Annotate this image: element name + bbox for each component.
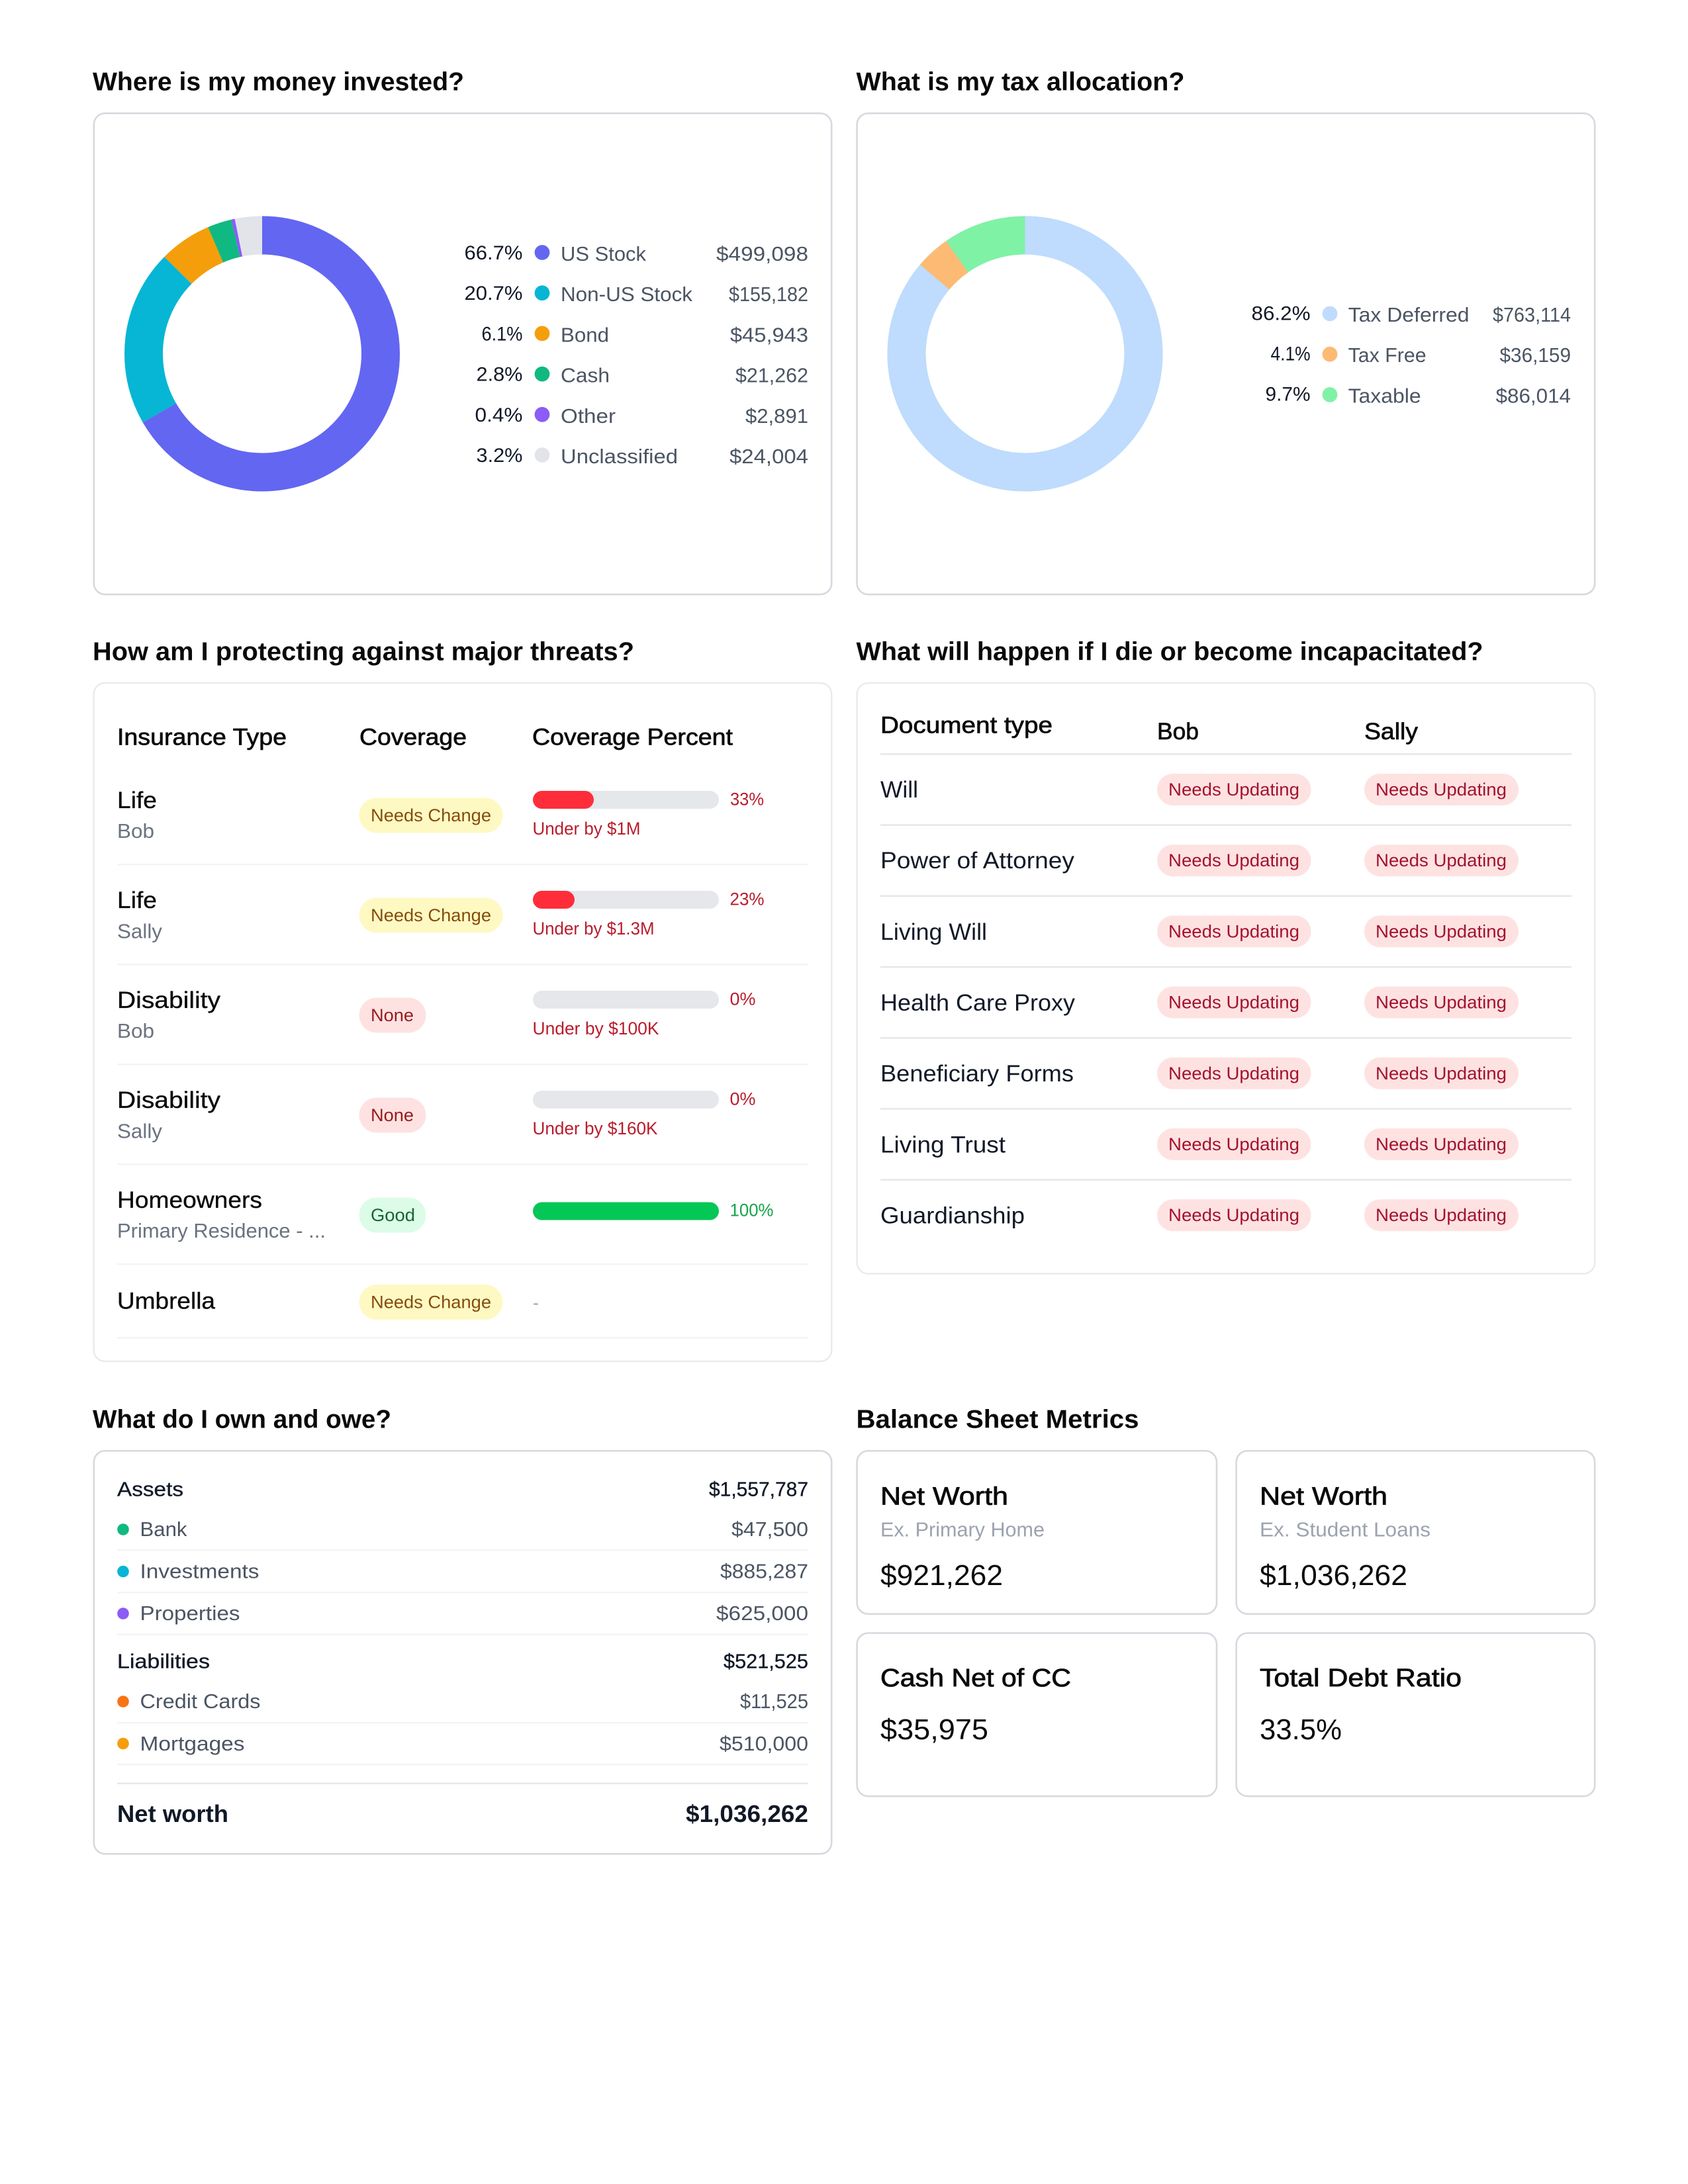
row: umbrella: -: [533, 1293, 539, 1313]
row: disability bob: None: [371, 1005, 414, 1025]
card: net worth ex student loans: $1,036,262: [1260, 1559, 1407, 1592]
row: disability sally: None: [371, 1105, 414, 1125]
legend: investment allocation: $499,098: [716, 242, 808, 265]
legend: investment allocation: 3.2%: [477, 445, 523, 467]
legend: investment allocation: 2.8%: [477, 364, 523, 386]
row: living trust: Needs Updating: [1376, 1134, 1507, 1154]
row: umbrella: Umbrella: [117, 1288, 216, 1314]
assets group: $1,557,787: [709, 1478, 808, 1501]
row: disability sally: Under by $160K: [532, 1118, 658, 1138]
row: umbrella: [117, 1285, 539, 1320]
legend: investment allocation: 20.7%: [465, 283, 523, 304]
row: will: Will: [880, 777, 918, 803]
legend: tax allocation: Taxable: [1348, 384, 1421, 407]
heading: where is my money invested: Where is my money invested?: [93, 68, 464, 97]
row: life bob: Life: [117, 788, 157, 813]
row: disability sally: [117, 1087, 756, 1142]
heading: balance sheet metrics: Balance Sheet Metrics: [857, 1406, 1139, 1433]
table header: Coverage Percent: [532, 724, 733, 751]
panel: estate documents table: [857, 683, 1595, 1274]
row: will: Needs Updating: [1168, 780, 1299, 799]
legend: tax allocation: [1251, 302, 1571, 407]
row: disability bob: 0%: [729, 989, 756, 1009]
row: power of attorney: Needs Updating: [1376, 850, 1507, 870]
row: life bob: Under by $1M: [532, 819, 641, 839]
row: health care proxy: Needs Updating: [1376, 993, 1507, 1013]
row: life sally: Needs Change: [371, 905, 491, 925]
legend: tax allocation: $86,014: [1496, 384, 1571, 407]
legend: investment allocation: [465, 242, 808, 468]
legend: investment allocation: $155,182: [729, 283, 808, 306]
liabilities group: Mortgages: [140, 1732, 245, 1755]
row: beneficiary forms: Needs Updating: [1168, 1064, 1299, 1083]
row: life bob: Bob: [117, 819, 154, 842]
row: homeowners: Primary Residence - ...: [117, 1219, 326, 1242]
card: total debt ratio: [1237, 1633, 1595, 1796]
legend: tax allocation: Tax Free: [1348, 343, 1427, 367]
liabilities group: Liabilities: [117, 1650, 210, 1673]
row: umbrella: Needs Change: [371, 1292, 491, 1312]
row: beneficiary forms: Beneficiary Forms: [880, 1061, 1074, 1087]
row: living will: Living Will: [880, 919, 987, 945]
card: net worth ex primary home: Ex. Primary Home: [880, 1518, 1045, 1541]
panel: insurance table: [94, 683, 831, 1361]
row: health care proxy: Needs Updating: [1168, 993, 1299, 1013]
table header: Sally: [1364, 719, 1419, 745]
legend: investment allocation: 66.7%: [465, 242, 523, 264]
legend: investment allocation: $45,943: [730, 323, 808, 346]
row: disability sally: Disability: [117, 1087, 221, 1113]
row: health care proxy: [880, 987, 1519, 1019]
legend: investment allocation: 6.1%: [482, 323, 523, 345]
row: life sally: Under by $1.3M: [532, 919, 654, 938]
card: net worth ex primary home: Net Worth: [880, 1482, 1008, 1510]
row: homeowners: [117, 1187, 773, 1242]
legend: tax allocation: Tax Deferred: [1348, 303, 1470, 326]
table header: Coverage: [359, 724, 467, 751]
row: health care proxy: Health Care Proxy: [880, 990, 1076, 1016]
row: power of attorney: Power of Attorney: [880, 848, 1075, 874]
table header: Bob: [1157, 719, 1199, 745]
row: power of attorney: Needs Updating: [1168, 850, 1299, 870]
card: net worth ex primary home: [857, 1451, 1217, 1614]
heading: die or become incapacitated: What will happen if I die or become incapacitated?: [857, 638, 1483, 666]
card: cash net of cc: [857, 1633, 1217, 1796]
row: living will: Needs Updating: [1376, 921, 1507, 941]
panel: investment allocation: [94, 113, 831, 594]
row: guardianship: [880, 1199, 1519, 1231]
row: living will: Needs Updating: [1168, 921, 1299, 941]
row: life sally: Sally: [117, 920, 162, 942]
liabilities group: $11,525: [740, 1690, 808, 1713]
row: homeowners: 100%: [729, 1201, 773, 1220]
assets group: Bank: [140, 1518, 187, 1541]
assets group: Assets: [117, 1478, 183, 1501]
row: will: [880, 774, 1519, 805]
legend: investment allocation: $21,262: [735, 364, 808, 387]
card: cash net of cc: Cash Net of CC: [880, 1664, 1071, 1692]
legend: investment allocation: Bond: [561, 323, 609, 346]
panel: balance sheet: [94, 1451, 831, 1854]
row: life sally: [117, 887, 764, 942]
assets group: Properties: [140, 1602, 240, 1625]
row: homeowners: Homeowners: [117, 1187, 262, 1213]
row: disability bob: Under by $100K: [532, 1019, 659, 1038]
row: beneficiary forms: [880, 1058, 1519, 1089]
row: life bob: 33%: [730, 789, 764, 809]
assets group: Investments: [140, 1560, 259, 1583]
card: total debt ratio: 33.5%: [1260, 1713, 1342, 1746]
heading: major threats: How am I protecting against major threats?: [93, 638, 634, 666]
row: will: Needs Updating: [1376, 780, 1507, 799]
legend: tax allocation: 9.7%: [1266, 384, 1311, 406]
legend: tax allocation: 4.1%: [1271, 343, 1311, 365]
legend: investment allocation: $2,891: [745, 404, 808, 428]
legend: investment allocation: Non-US Stock: [561, 283, 692, 306]
row: disability sally: 0%: [729, 1089, 756, 1109]
assets group: [117, 1478, 808, 1625]
row: life bob: [117, 788, 764, 842]
table header: Document type: [880, 712, 1053, 739]
assets group: $47,500: [731, 1518, 808, 1541]
card: net worth ex student loans: Net Worth: [1260, 1482, 1387, 1510]
net worth total: $1,036,262: [686, 1800, 808, 1827]
card: net worth ex student loans: [1237, 1451, 1595, 1614]
row: power of attorney: [880, 844, 1519, 876]
net worth total: Net worth: [117, 1800, 228, 1827]
row: life sally: Life: [117, 887, 157, 913]
legend: investment allocation: Unclassified: [561, 445, 678, 468]
row: beneficiary forms: Needs Updating: [1376, 1064, 1507, 1083]
row: life sally: 23%: [729, 889, 764, 909]
card: cash net of cc: $35,975: [880, 1713, 988, 1746]
row: disability bob: Bob: [117, 1019, 154, 1042]
legend: investment allocation: 0.4%: [475, 404, 523, 426]
table header: Insurance Type: [117, 724, 287, 751]
donut chart: investment allocation: [144, 236, 381, 473]
legend: investment allocation: US Stock: [561, 242, 646, 265]
row: living will: [880, 915, 1519, 947]
net worth total: [117, 1800, 808, 1827]
legend: investment allocation: $24,004: [729, 445, 808, 468]
row: life bob: Needs Change: [371, 805, 491, 825]
row: guardianship: Needs Updating: [1376, 1205, 1507, 1225]
panel: tax allocation: [857, 113, 1595, 594]
row: disability sally: Sally: [117, 1120, 162, 1142]
row: disability bob: [117, 987, 756, 1042]
row: living trust: Living Trust: [880, 1132, 1006, 1158]
heading: own and owe: What do I own and owe?: [93, 1406, 391, 1433]
card: net worth ex primary home: $921,262: [880, 1559, 1003, 1592]
legend: tax allocation: $763,114: [1493, 303, 1571, 326]
legend: investment allocation: Other: [561, 404, 616, 428]
row: homeowners: Good: [371, 1205, 415, 1225]
row: guardianship: Needs Updating: [1168, 1205, 1299, 1225]
card: total debt ratio: Total Debt Ratio: [1260, 1664, 1462, 1692]
donut chart: tax allocation: [907, 236, 1144, 473]
liabilities group: $521,525: [724, 1650, 808, 1673]
legend: tax allocation: 86.2%: [1251, 302, 1311, 324]
table header: [880, 712, 1419, 745]
liabilities group: Credit Cards: [140, 1690, 261, 1713]
row: disability bob: Disability: [117, 987, 221, 1013]
row: living trust: [880, 1128, 1519, 1160]
legend: tax allocation: $36,159: [1500, 343, 1571, 367]
assets group: $885,287: [720, 1560, 808, 1583]
heading: tax allocation: What is my tax allocation?: [857, 68, 1185, 97]
row: guardianship: Guardianship: [880, 1203, 1025, 1229]
card: net worth ex student loans: Ex. Student Loans: [1260, 1518, 1430, 1541]
row: living trust: Needs Updating: [1168, 1134, 1299, 1154]
liabilities group: $510,000: [720, 1732, 808, 1755]
liabilities group: [117, 1650, 808, 1755]
legend: investment allocation: Cash: [561, 364, 610, 387]
table header: [117, 724, 733, 751]
assets group: $625,000: [716, 1602, 808, 1625]
